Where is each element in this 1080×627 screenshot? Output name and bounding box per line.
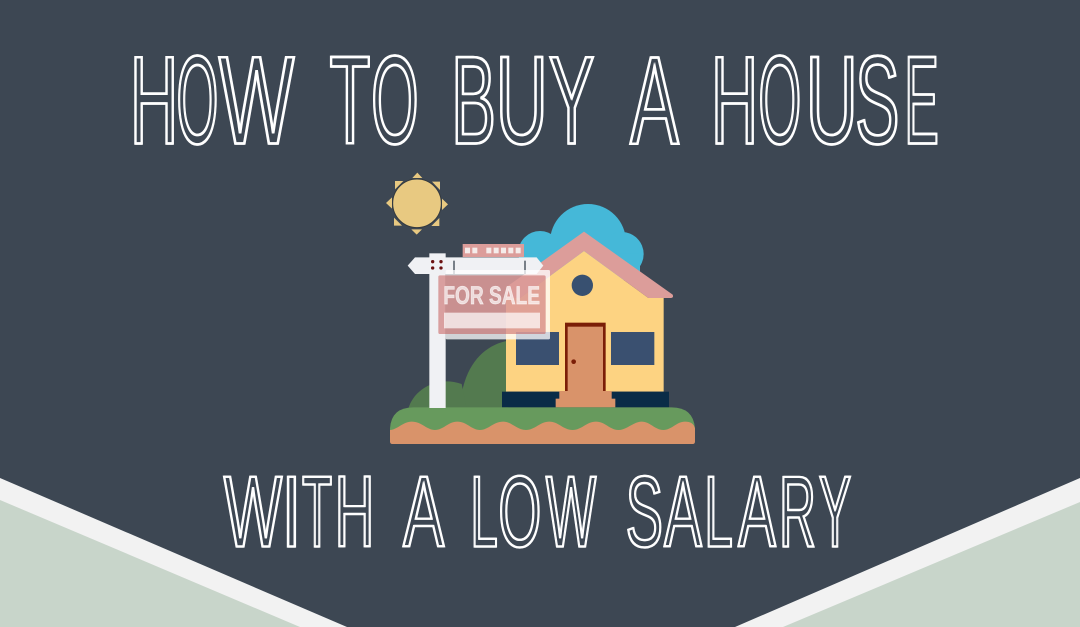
title: second line: O — [498, 457, 541, 569]
sign board — [438, 270, 550, 339]
house — [502, 232, 673, 407]
title: first line: U — [806, 32, 858, 171]
title: first line: S — [855, 32, 899, 171]
steps — [556, 391, 615, 407]
title: second line: A — [738, 457, 776, 569]
cloud — [518, 204, 644, 280]
bolts — [431, 260, 443, 270]
title: first line: Y — [549, 32, 593, 171]
title: second line: H — [335, 457, 374, 569]
bushes — [408, 341, 508, 410]
arm — [408, 257, 543, 274]
title: first line: W — [219, 32, 294, 171]
title: second line: A — [403, 457, 444, 569]
title: first line: B — [451, 32, 496, 171]
round attic window — [572, 275, 593, 296]
for sale text: FOR SALE — [443, 283, 540, 310]
title: second line: L — [471, 457, 498, 569]
corner: bottom left band — [0, 478, 347, 627]
top pink plate — [463, 244, 524, 257]
title: first line: T — [330, 32, 370, 171]
title: second line: I — [282, 457, 301, 569]
foundation — [502, 392, 669, 407]
sign post — [408, 244, 550, 408]
infographic canvas: E — [904, 32, 939, 171]
title: first line: H — [711, 32, 758, 171]
title: second line: L — [704, 457, 733, 569]
title: second line: T — [302, 457, 332, 569]
title: second line: A — [664, 457, 702, 569]
title: first line: A — [630, 32, 679, 171]
corner: bottom right band — [735, 478, 1080, 627]
title: first line: O — [371, 32, 419, 171]
infographic canvas: Y — [819, 457, 851, 569]
door — [565, 323, 606, 392]
hooks — [453, 261, 526, 274]
title: second line: S — [626, 457, 663, 569]
title: first line: O — [758, 32, 801, 171]
title: first line: U — [496, 32, 548, 171]
house body — [506, 251, 664, 392]
icon: sun — [386, 173, 448, 235]
title: second line: W — [224, 457, 282, 569]
title: second line: R — [779, 457, 816, 569]
roof — [506, 232, 673, 298]
illustration: house for sale — [386, 173, 695, 444]
title: first line: O — [177, 32, 218, 171]
title: first line: H — [130, 32, 178, 171]
windows — [516, 332, 654, 365]
title: second line: W — [546, 457, 596, 569]
post — [429, 253, 446, 408]
ground — [390, 407, 695, 444]
